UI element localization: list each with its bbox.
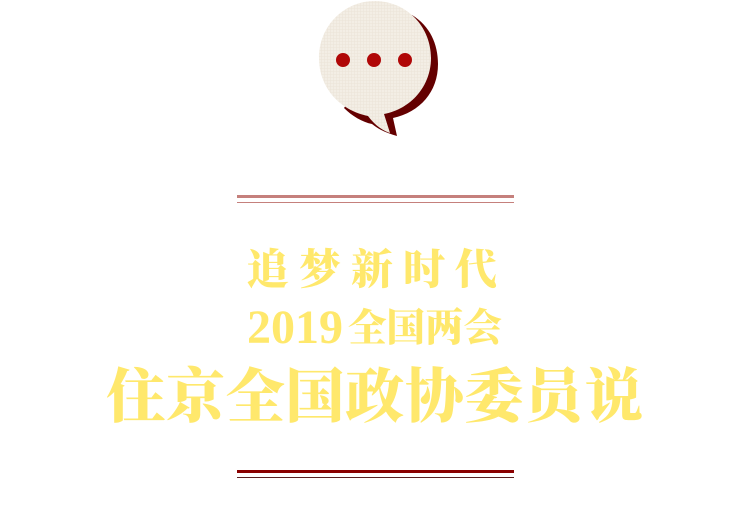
main title: 住京全国政协委员说 <box>106 364 644 430</box>
dots <box>336 53 412 67</box>
bubble body <box>319 1 431 133</box>
title line 2 <box>247 301 502 354</box>
icon: speech bubble <box>319 1 438 136</box>
title line 2: 全国两会 <box>348 308 502 350</box>
bubble shadow <box>344 15 438 136</box>
title line 2: 2019 <box>247 301 343 354</box>
bottom divider <box>237 470 514 478</box>
top divider <box>237 195 514 203</box>
title line 1: 追梦新时代 <box>247 248 507 294</box>
